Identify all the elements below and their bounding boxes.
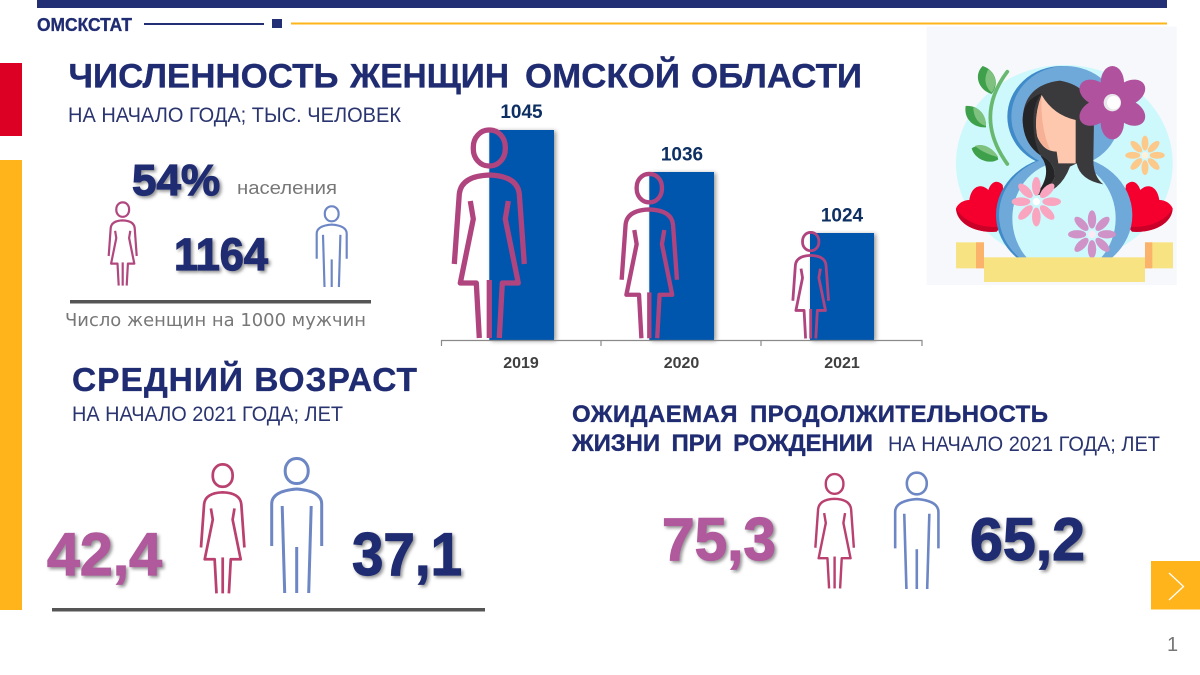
icon: woman — [109, 202, 137, 286]
title: ОБЛАСТИ — [691, 58, 862, 96]
illustration: woman in figure eight — [927, 27, 1177, 285]
pink flower — [1012, 177, 1061, 226]
purple flower — [1075, 66, 1150, 139]
face — [1036, 95, 1076, 163]
subheading: НА НАЧАЛО 2021 ГОДА; ЛЕТ — [888, 433, 1160, 456]
bar chart: women by year — [442, 102, 922, 372]
title: ЖЕНЩИН — [349, 58, 509, 96]
header: organisation name and rule — [37, 15, 1167, 35]
title — [68, 56, 862, 96]
ribbon — [956, 242, 1173, 282]
blue figure eight — [996, 66, 1132, 275]
next arrow button — [1151, 561, 1200, 610]
mauve flower — [1068, 210, 1116, 258]
women value: 75,3 — [662, 506, 776, 573]
men value: 37,1 — [352, 521, 462, 588]
icon: man — [317, 206, 347, 287]
heading: ОЖИДАЕМАЯ ПРОДОЛЖИТЕЛЬНОСТЬ — [572, 401, 1048, 428]
icon: woman — [815, 474, 854, 588]
year 2020: 2020 — [664, 355, 699, 372]
ratio value: 1164 — [174, 229, 268, 280]
icon: man — [895, 473, 938, 589]
women value: 42,4 — [47, 521, 163, 588]
panel: median age — [47, 360, 485, 612]
value 1045: 1045 — [500, 102, 543, 123]
year 2021: 2021 — [824, 355, 860, 372]
icon: woman — [201, 464, 244, 593]
year 2019: 2019 — [503, 355, 539, 372]
title: ЧИСЛЕННОСТЬ — [68, 58, 338, 96]
organisation name: ОМСКСТАТ — [37, 15, 132, 35]
icon: man — [272, 458, 322, 593]
panel: life expectancy — [571, 401, 1160, 589]
hair — [1023, 81, 1103, 196]
subheading: НА НАЧАЛО 2021 ГОДА; ЛЕТ — [72, 403, 343, 426]
figure 2019 — [454, 130, 524, 338]
share value: 54% — [132, 156, 220, 205]
title: ОМСКОЙ — [525, 56, 680, 96]
panel: population share — [65, 156, 371, 331]
ratio caption: Число женщин на 1000 мужчин — [65, 310, 366, 331]
share label: населения — [237, 178, 337, 198]
figure 2021 — [793, 232, 829, 338]
page number: 1 — [1167, 634, 1178, 656]
green branch — [965, 66, 1007, 164]
heading: СРЕДНИЙ ВОЗРАСТ — [72, 360, 418, 399]
heading second line: ЖИЗНИ ПРИ РОЖДЕНИИ — [571, 430, 873, 457]
red tulip left — [956, 182, 1007, 232]
orange side accent — [0, 160, 22, 610]
men value: 65,2 — [970, 506, 1085, 573]
bar 2020 — [649, 172, 714, 340]
orange flower — [1125, 136, 1165, 175]
red tulip right — [1121, 182, 1173, 232]
red side accent — [0, 63, 22, 136]
top header bar — [37, 0, 1167, 8]
value 1036: 1036 — [661, 144, 703, 166]
bar 2019 — [489, 130, 554, 340]
subtitle: НА НАЧАЛО ГОДА; ТЫС. ЧЕЛОВЕК — [68, 104, 402, 127]
value 1024: 1024 — [821, 206, 864, 226]
bar 2021 — [810, 233, 874, 340]
figure 2020 — [622, 174, 677, 338]
